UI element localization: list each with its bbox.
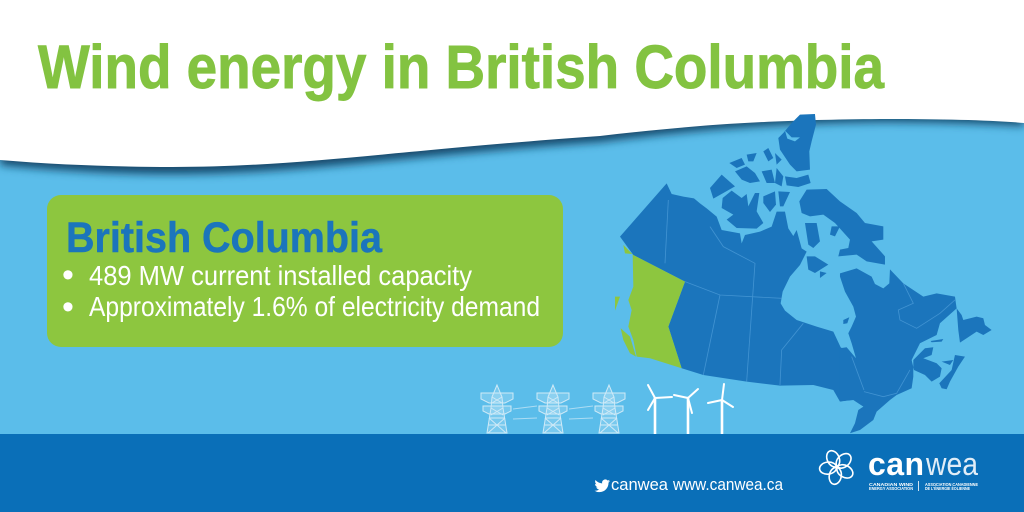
logo flower mark <box>819 449 855 485</box>
Lake Huron <box>840 400 863 410</box>
power lines <box>513 406 593 419</box>
website: www.canwea.ca <box>672 476 784 494</box>
logo tagline English: CANADIAN WIND <box>869 482 914 487</box>
tower 3 <box>593 385 625 433</box>
footer bar <box>0 434 1024 512</box>
tower 2 <box>537 385 569 433</box>
logo wordmark: can <box>868 446 924 482</box>
icon: transmission towers <box>481 385 625 433</box>
bullet: electricity demand: • <box>62 288 74 326</box>
title: Wind energy in British Columbia <box>38 33 885 101</box>
Arctic islands <box>710 114 885 278</box>
logo wordmark: wea <box>925 446 978 482</box>
icon: wind turbines <box>648 384 733 434</box>
turbine 3 <box>708 384 733 434</box>
bullet: installed capacity: • <box>62 256 74 294</box>
CanWEA logo: DE L'ÉNERGIE ÉOLIENNE <box>925 484 970 491</box>
white header wave <box>0 0 1024 174</box>
British Columbia highlight <box>615 245 685 368</box>
Quebec, Atlantic and Ontario <box>840 268 992 433</box>
mainland west and north <box>620 183 863 402</box>
map of Canada <box>615 114 992 433</box>
bullet: electricity demand: Approximately 1.6% of electricity demand <box>89 291 540 322</box>
panel: British Columbia facts <box>47 195 563 347</box>
panel heading: British Columbia <box>66 214 383 262</box>
turbine 1 <box>648 385 672 434</box>
logo wordmark <box>868 446 978 482</box>
social handle: canwea <box>611 476 669 494</box>
province borders <box>665 200 955 397</box>
logo tagline French: ASSOCIATION CANADIENNE <box>925 482 978 487</box>
bullet: installed capacity: 489 MW current installed capacity <box>89 260 472 291</box>
CanWEA logo: ENERGY ASSOCIATION <box>869 486 914 491</box>
Ellesmere fiord <box>785 131 800 141</box>
tower 1 <box>481 385 513 433</box>
turbine 2 <box>674 389 698 434</box>
CanWEA logo <box>819 446 978 491</box>
icon: twitter bird <box>594 479 610 492</box>
